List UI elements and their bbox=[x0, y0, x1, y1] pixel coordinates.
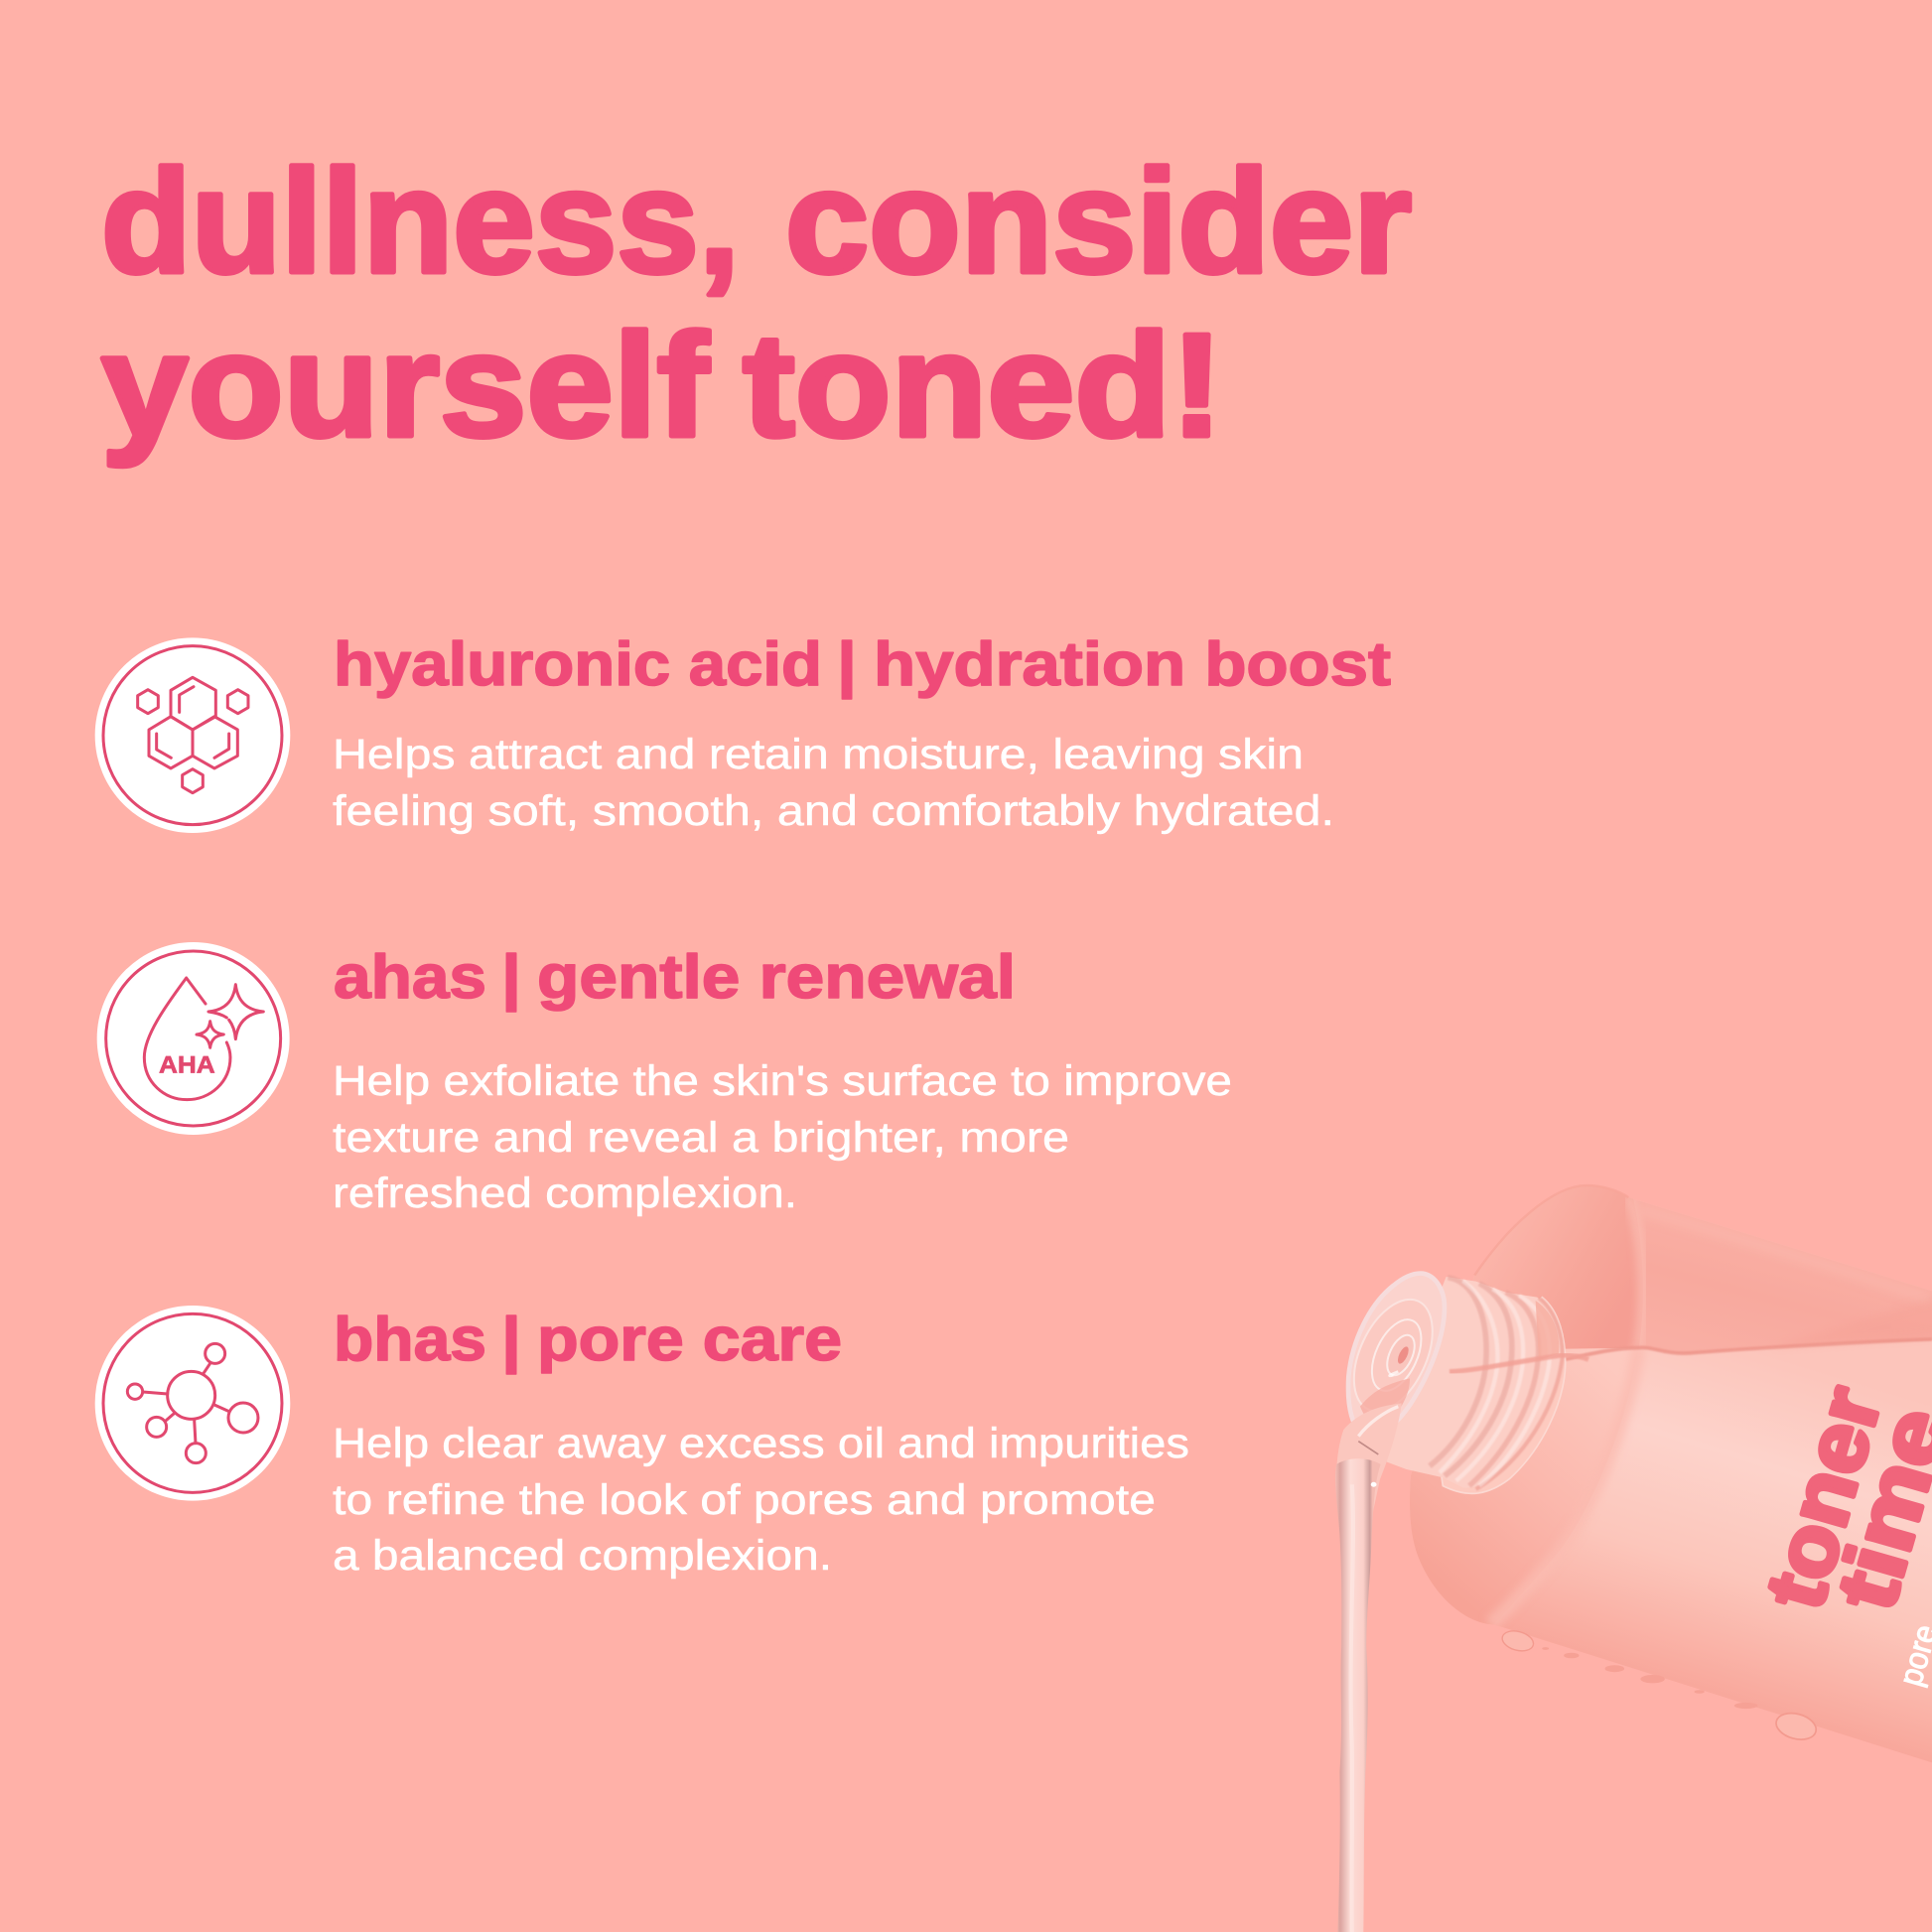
title: yourself bbox=[101, 304, 710, 468]
text: hyaluronic acid description: feeling soft, smooth, and comfortably hydrated. bbox=[333, 787, 1334, 835]
water droplets bbox=[1500, 1628, 1819, 1743]
water sheet over lip bbox=[1336, 1403, 1402, 1526]
panel: ahas bbox=[97, 942, 1232, 1217]
text: ahas description: Help exfoliate the skin's surface to improve bbox=[333, 1057, 1232, 1105]
bottle body bbox=[1400, 1178, 1932, 1773]
text: ahas description: texture and reveal a brighter, more bbox=[333, 1114, 1069, 1162]
icon: AHA droplet bbox=[97, 942, 290, 1135]
toner stream bbox=[1335, 1458, 1381, 1932]
heading: bhas bbox=[334, 1306, 842, 1375]
bottle cap opening bbox=[1338, 1274, 1449, 1435]
bottle neck bbox=[1336, 1274, 1588, 1526]
title: toned! bbox=[743, 304, 1223, 468]
icon: hexagon molecule bbox=[95, 637, 290, 833]
heading: ahas: | bbox=[501, 943, 521, 1013]
heading: hyaluronic acid bbox=[334, 630, 1391, 700]
title bbox=[101, 140, 1412, 468]
text: bhas description: a balanced complexion. bbox=[333, 1532, 832, 1580]
heading: bhas: | bbox=[501, 1306, 521, 1375]
text: bhas description bbox=[333, 1420, 1189, 1580]
panel: hyaluronic acid bbox=[95, 630, 1391, 835]
text: hyaluronic acid description: Helps attract and retain moisture, leaving skin bbox=[333, 731, 1304, 778]
heading: bhas: pore care bbox=[537, 1306, 842, 1374]
bottle label: toner: toner bbox=[1747, 1377, 1900, 1618]
heading: ahas bbox=[334, 943, 1016, 1013]
title: dullness, bbox=[101, 140, 740, 304]
heading: hyaluronic acid: hydration boost bbox=[874, 630, 1391, 699]
heading: hyaluronic acid: hyaluronic acid bbox=[334, 630, 822, 699]
heading: ahas: gentle renewal bbox=[537, 943, 1016, 1012]
text: hyaluronic acid description bbox=[333, 731, 1334, 835]
text: ahas description bbox=[333, 1057, 1232, 1217]
text: bhas description: to refine the look of pores and promote bbox=[333, 1476, 1156, 1524]
liquid line bbox=[1563, 1339, 1932, 1360]
heading: ahas: ahas bbox=[334, 943, 486, 1012]
bottle pouring toner bbox=[1335, 1178, 1932, 1932]
title: consider bbox=[785, 140, 1412, 304]
panel: bhas bbox=[95, 1306, 1189, 1580]
icon: AHA droplet: AHA bbox=[159, 1052, 215, 1079]
heading: bhas: bhas bbox=[334, 1306, 486, 1374]
heading: hyaluronic acid: | bbox=[837, 630, 857, 700]
text: bhas description: Help clear away excess oil and impurities bbox=[333, 1420, 1189, 1467]
text: ahas description: refreshed complexion. bbox=[333, 1170, 797, 1217]
icon: molecule bbox=[95, 1306, 290, 1501]
